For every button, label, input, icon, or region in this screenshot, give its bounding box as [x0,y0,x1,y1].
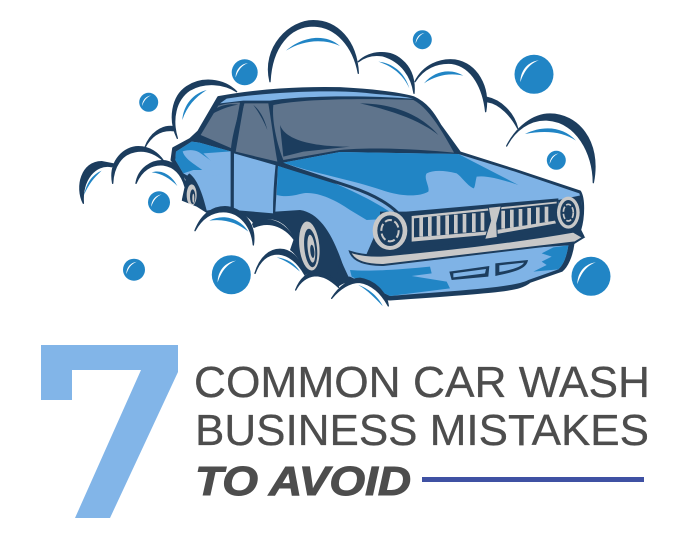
door panel [233,153,276,213]
bubble [212,255,251,294]
title line 2: BUSINESS MISTAKES [195,406,649,455]
bubble [148,191,170,213]
large numeral 7 [41,345,178,518]
character line [279,163,398,213]
side windows [201,103,240,148]
front wheel [288,215,347,280]
car [172,88,583,299]
windshield reflections [213,103,438,157]
bubble [547,151,566,170]
right headlight [557,195,582,229]
bumper [350,232,583,265]
title line 3: TO AVOID [195,458,411,504]
car silhouette [172,88,583,299]
rear wheel [182,173,207,213]
lower valance [343,245,568,296]
bubble [123,259,145,281]
bumper slots [449,260,528,280]
door seams [232,102,243,210]
hood [283,152,581,217]
left headlight [373,211,411,252]
bubble [572,257,610,296]
illustration: car in foam [80,21,610,327]
grille [407,198,560,248]
soap bubbles [123,30,610,296]
roof strip [220,91,413,103]
front side panel [275,166,380,277]
foam clouds behind car [80,21,595,203]
windshield [273,99,454,160]
bubble [413,30,432,49]
fender dark wedge [337,258,350,287]
bubble [514,55,554,94]
bubble [232,59,258,85]
underline rule [422,477,644,482]
title line 1: COMMON CAR WASH [194,358,650,407]
valance accents [533,245,568,272]
rear quarter panel [175,142,231,211]
grille emblem [485,206,501,239]
bubble [139,93,158,112]
foam in front of car [136,161,388,327]
